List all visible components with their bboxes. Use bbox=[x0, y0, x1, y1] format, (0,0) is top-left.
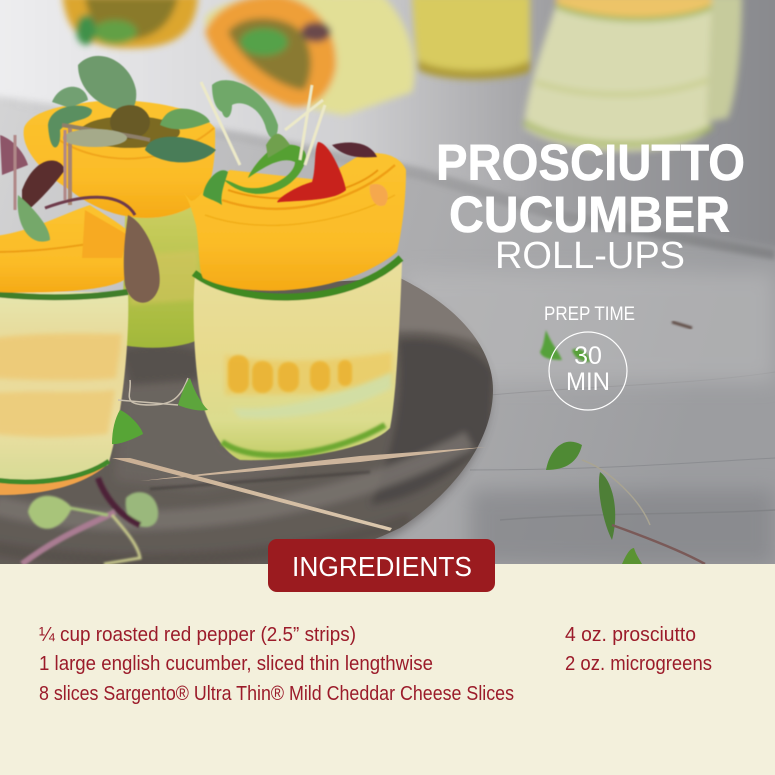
microgreens on plate bbox=[112, 378, 208, 444]
toothpicks bbox=[112, 447, 486, 531]
roll: back bbox=[24, 100, 215, 348]
ingredients list: left column: ¼ cup roasted red pepper (2.5” strips) bbox=[39, 624, 356, 646]
prep time badge: MIN bbox=[566, 368, 610, 396]
ingredients list: right column bbox=[565, 624, 712, 675]
title bbox=[436, 134, 745, 277]
blurred rolls in the background bbox=[62, 0, 742, 151]
microgreens on table right bbox=[540, 330, 705, 564]
plate bbox=[0, 270, 500, 571]
ingredients list: right column: 4 oz. prosciutto bbox=[565, 624, 696, 646]
ingredients list: left column: 1 large english cucumber, sliced thin lengthwise bbox=[39, 653, 433, 675]
title: ROLL-UPS bbox=[495, 235, 685, 277]
microgreens on back roll bbox=[48, 56, 216, 205]
ingredients list: left column: 8 slices Sargento® Ultra Thin® Mild Cheddar Cheese Slices bbox=[39, 683, 514, 705]
microgreens on left roll bbox=[0, 130, 160, 303]
prep time badge bbox=[544, 304, 635, 410]
ingredients panel bbox=[0, 539, 775, 775]
ingredients list: left column bbox=[39, 624, 514, 705]
ingredients list: right column: 2 oz. microgreens bbox=[565, 653, 712, 675]
title: PROSCIUTTO bbox=[436, 134, 745, 191]
microgreens bottom left bbox=[22, 478, 158, 564]
roll: center bbox=[183, 153, 406, 460]
prep time badge: PREP TIME bbox=[544, 304, 635, 325]
red pepper and microgreens on center roll bbox=[201, 80, 377, 205]
photo background: table and platter bbox=[0, 0, 775, 565]
ingredients banner bbox=[268, 539, 495, 592]
ingredients banner: INGREDIENTS bbox=[292, 551, 472, 582]
roll: left bbox=[0, 205, 131, 495]
title: CUCUMBER bbox=[449, 186, 730, 243]
prep time badge: 30 bbox=[574, 342, 602, 370]
